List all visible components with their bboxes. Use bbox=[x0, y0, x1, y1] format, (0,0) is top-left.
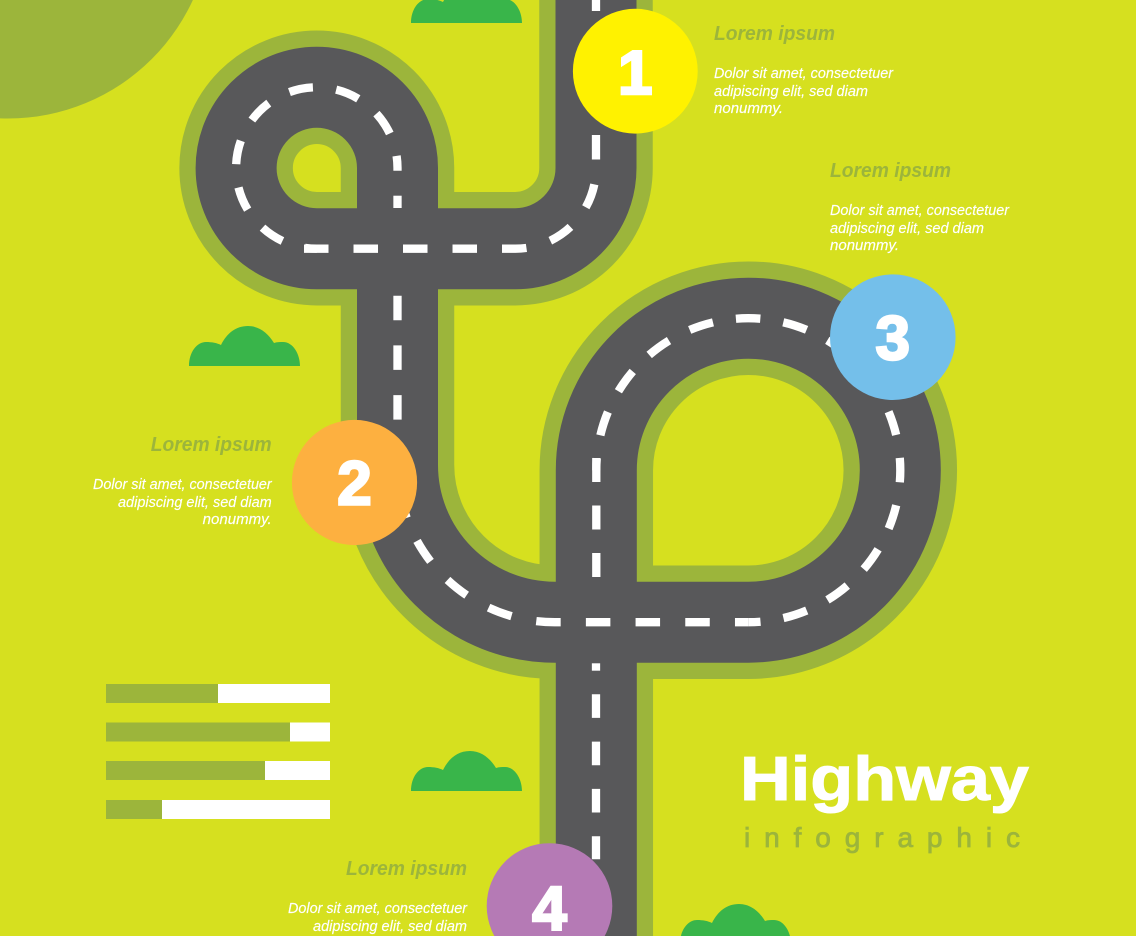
marker 1: 1 bbox=[618, 39, 653, 108]
text block 3 bbox=[830, 160, 1010, 254]
marker 1 bbox=[573, 9, 698, 134]
bush: left middle bbox=[189, 326, 300, 366]
bush: top bbox=[411, 0, 522, 23]
text block 3: Lorem ipsum bbox=[830, 160, 951, 182]
text block 2 bbox=[93, 434, 273, 528]
text block 4: adipiscing elit, sed diam bbox=[313, 919, 467, 935]
text block 2: Dolor sit amet, consectetuer bbox=[93, 477, 273, 493]
marker 4 bbox=[487, 843, 612, 936]
text block 4: Lorem ipsum bbox=[346, 858, 467, 880]
text block 1: Dolor sit amet, consectetuer bbox=[714, 66, 894, 82]
corner circle decoration bbox=[0, 0, 212, 118]
text block 1: Lorem ipsum bbox=[714, 23, 835, 45]
text block 3: Dolor sit amet, consectetuer bbox=[830, 203, 1010, 219]
text block 1 bbox=[714, 23, 894, 117]
subtitle: infographic bbox=[744, 822, 1020, 853]
text block 3: nonummy. bbox=[830, 238, 899, 254]
bush: bottom right bbox=[680, 904, 791, 936]
text block 1: nonummy. bbox=[714, 101, 783, 117]
text block 2: adipiscing elit, sed diam bbox=[118, 495, 272, 511]
highway road bbox=[236, 0, 900, 936]
marker 3: 3 bbox=[876, 304, 910, 374]
text block 4: Dolor sit amet, consectetuer bbox=[288, 901, 468, 917]
text block 1: adipiscing elit, sed diam bbox=[714, 84, 868, 100]
marker 2 bbox=[292, 420, 417, 545]
text block 3: adipiscing elit, sed diam bbox=[830, 221, 984, 237]
progress bars bbox=[106, 684, 330, 819]
text block 2: Lorem ipsum bbox=[151, 434, 272, 456]
marker 3 bbox=[830, 274, 956, 400]
marker 2: 2 bbox=[337, 450, 372, 518]
text block 4 bbox=[288, 858, 468, 936]
title: Highway bbox=[740, 745, 1030, 814]
bush: centre lower bbox=[411, 751, 522, 791]
text block 2: nonummy. bbox=[203, 512, 272, 528]
